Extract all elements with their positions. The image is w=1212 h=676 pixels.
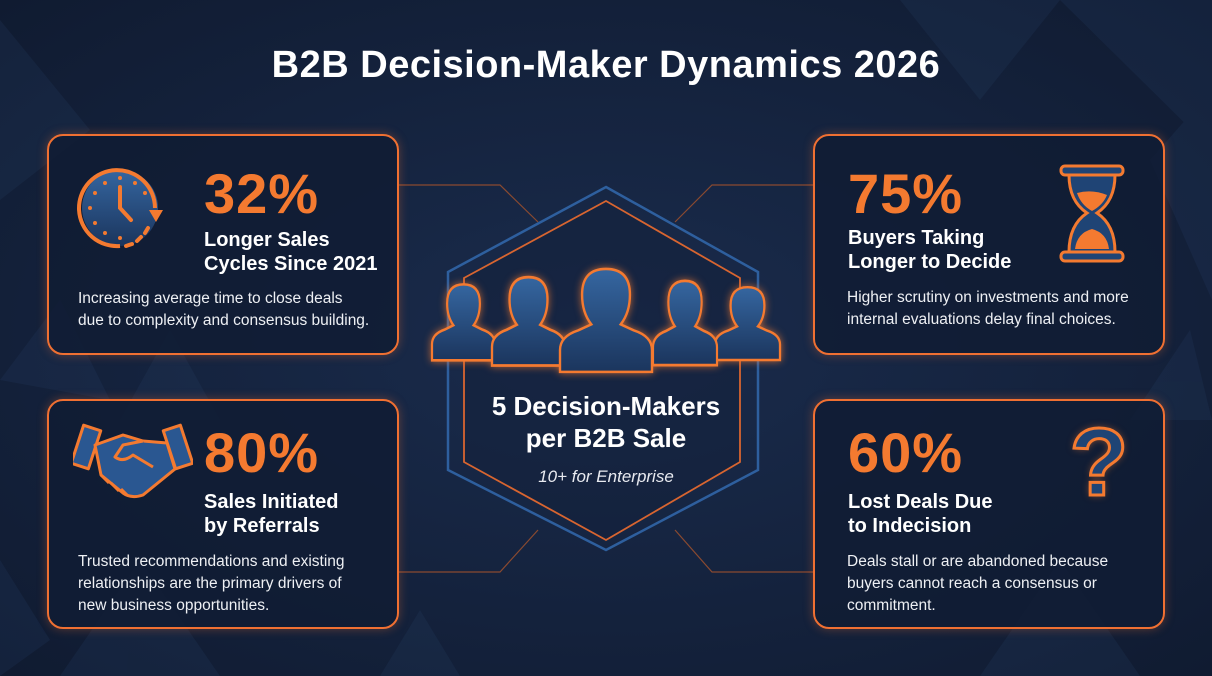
label — [204, 491, 338, 537]
center subtext: 10+ for Enterprise — [538, 467, 674, 486]
description: Increasing average time to close deals — [78, 290, 343, 307]
description: buyers cannot reach a consensus or — [847, 575, 1097, 592]
icon: question mark: ? — [1070, 409, 1128, 516]
stat: 32% — [204, 162, 319, 225]
panel: 32% — [47, 134, 399, 355]
description — [847, 553, 1108, 614]
stat: 75% — [848, 162, 963, 225]
panel: 75% — [813, 134, 1165, 355]
label: Sales Initiated — [204, 491, 338, 513]
description: due to complexity and consensus building. — [78, 312, 369, 329]
center heading — [492, 391, 720, 453]
icon: clock — [77, 168, 163, 248]
label: by Referrals — [204, 515, 320, 537]
description: Deals stall or are abandoned because — [847, 553, 1108, 570]
stat: 80% — [204, 421, 319, 484]
description: new business opportunities. — [78, 597, 269, 614]
description: relationships are the primary drivers of — [78, 575, 342, 592]
description — [847, 289, 1129, 328]
label: Lost Deals Due — [848, 491, 992, 513]
label: Buyers Taking — [848, 227, 984, 249]
description: Higher scrutiny on investments and more — [847, 289, 1129, 306]
label: Cycles Since 2021 — [204, 253, 377, 275]
label — [204, 229, 377, 275]
icon: handshake — [73, 424, 193, 498]
label — [848, 227, 1011, 273]
center heading: 5 Decision-Makers — [492, 391, 720, 421]
label: to Indecision — [848, 515, 971, 537]
icon: hourglass — [1060, 164, 1124, 262]
description — [78, 553, 345, 614]
label — [848, 491, 992, 537]
description: Trusted recommendations and existing — [78, 553, 345, 570]
stat: 60% — [848, 421, 963, 484]
label: Longer Sales — [204, 229, 330, 251]
connectors — [399, 185, 813, 572]
title: B2B Decision-Maker Dynamics 2026 — [272, 44, 940, 86]
center hexagon: decision makers — [446, 186, 760, 552]
label: Longer to Decide — [848, 251, 1011, 273]
description — [78, 290, 369, 329]
description: commitment. — [847, 597, 936, 614]
panel: 80% — [47, 399, 399, 629]
panel: 60% — [813, 399, 1165, 629]
description: internal evaluations delay final choices. — [847, 311, 1116, 328]
center heading: per B2B Sale — [526, 423, 686, 453]
